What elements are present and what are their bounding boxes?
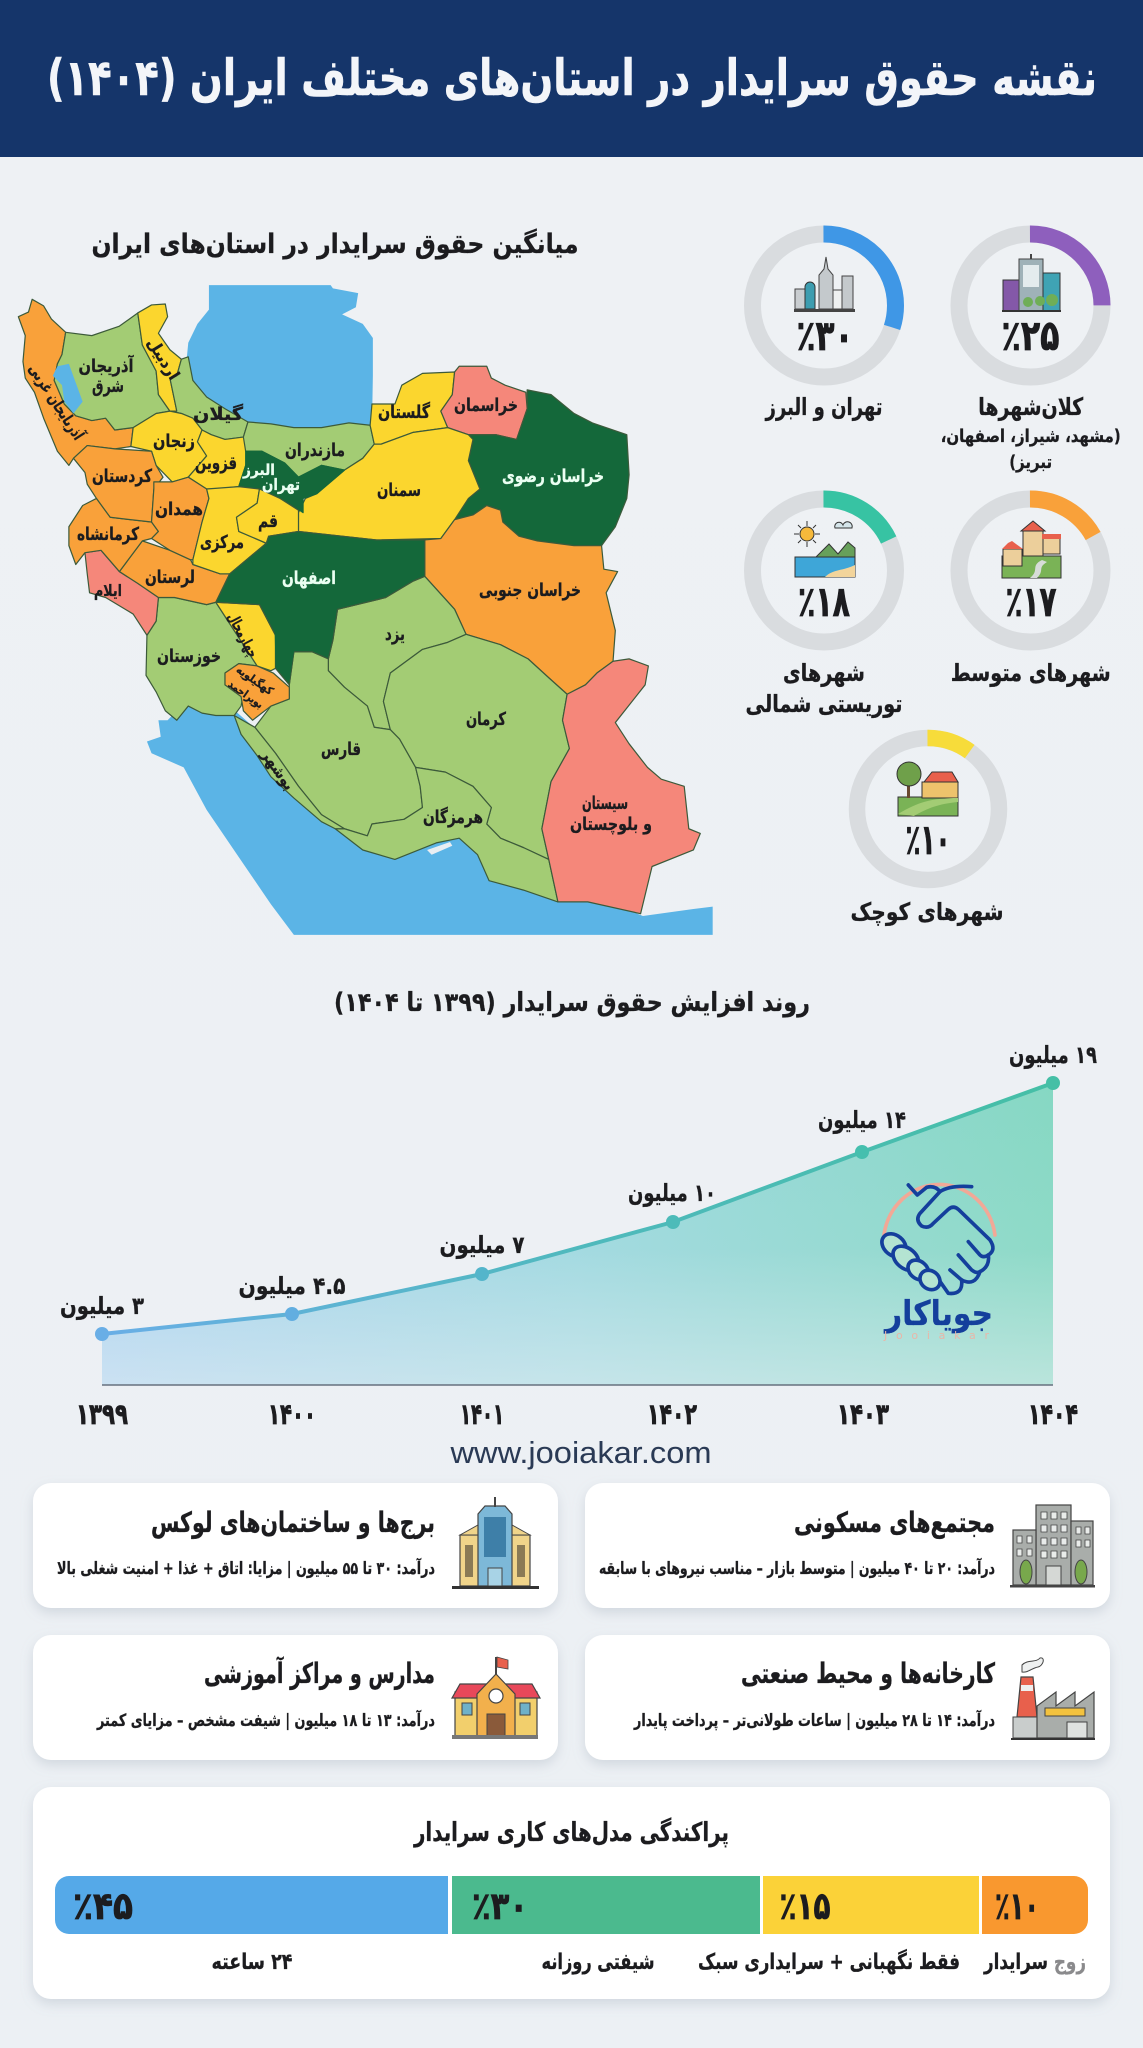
map of Iran provinces: مرکزی	[200, 532, 244, 553]
map of Iran provinces	[18, 285, 713, 935]
header banner with title	[0, 0, 1143, 157]
map of Iran provinces: لرستان	[145, 567, 195, 588]
map of Iran provinces: قزوین	[195, 453, 237, 474]
year axis labels: ۱۳۹۹	[76, 1397, 128, 1431]
map of Iran provinces: بویراحمد	[226, 678, 266, 711]
map of Iran provinces: تهران	[262, 475, 300, 494]
donut: medium cities 17%	[951, 499, 1111, 687]
map of Iran provinces: گلستان	[378, 401, 430, 423]
map of Iran provinces: خراسمان	[454, 395, 518, 416]
card: towers and luxury buildings: برج‌ها و ساختمان‌های لوکس	[151, 1506, 435, 1540]
map of Iran provinces: آذربایجان غربی	[25, 360, 89, 444]
donut: northern tourist cities 18%	[746, 499, 902, 718]
icon: tower	[452, 1497, 539, 1589]
icon: apartment block	[1010, 1505, 1095, 1588]
card: factories: درآمد: ۱۴ تا ۲۸ میلیون | ساعات طولانی‌تر – پرداخت پایدار	[633, 1709, 995, 1731]
donut: small cities 10%	[850, 738, 1004, 926]
card: towers and luxury buildings	[33, 1483, 558, 1608]
data labels	[60, 1041, 1097, 1320]
map of Iran provinces: سمنان	[377, 480, 421, 501]
card: towers and luxury buildings: درآمد: ۳۰ تا ۵۵ میلیون | مزایا: اتاق + غذا + امنیت شغلی بالا	[57, 1557, 435, 1579]
map of Iran provinces: همدان	[155, 499, 203, 520]
map of Iran provinces: کرمان	[466, 709, 506, 730]
map of Iran provinces: خراسان رضوی	[502, 466, 604, 487]
icon: small house and tree	[897, 762, 958, 816]
card: residential complexes	[585, 1483, 1110, 1608]
year axis labels: ۱۴۰۳	[837, 1397, 889, 1431]
map of Iran provinces: هرمزگان	[423, 806, 483, 828]
data labels: ۱۹ میلیون	[1009, 1041, 1097, 1069]
card: factories	[585, 1635, 1110, 1760]
map of Iran provinces: آذریجان	[78, 354, 134, 377]
data labels: ۳ میلیون	[60, 1292, 144, 1320]
icon: metropolis buildings	[1002, 254, 1061, 312]
year axis labels: ۱۴۰۲	[647, 1397, 697, 1431]
donut: Tehran and Alborz 30%: ٪۳۰	[796, 311, 854, 360]
logo: handshake Jooiakar: جویاکار	[883, 1294, 993, 1334]
website url: www.jooiakar.com	[449, 1435, 712, 1470]
map of Iran provinces: کرمانشاه	[77, 524, 139, 545]
donut: northern tourist cities 18%: توریستی شمالی	[746, 690, 902, 718]
map of Iran provinces: ایلام	[94, 581, 122, 600]
map of Iran provinces: چهارمحال	[223, 610, 262, 661]
panel: work model distribution	[33, 1787, 1110, 1999]
donut: metropolises 25%: تبریز)	[1009, 452, 1052, 473]
card: residential complexes: درآمد: ۲۰ تا ۴۰ میلیون | متوسط بازار – مناسب نیروهای با سابقه	[599, 1557, 995, 1579]
map of Iran provinces: قارس	[321, 739, 361, 760]
year axis labels	[76, 1397, 1078, 1431]
map of Iran provinces: سیستان	[582, 793, 628, 814]
card: residential complexes: مجتمع‌های مسکونی	[794, 1506, 995, 1539]
bar labels: فقط نگهبانی + سرایداری سبک	[698, 1948, 960, 1975]
map of Iran provinces: شرق	[92, 376, 124, 397]
panel heading: پراکندگی مدل‌های کاری سرایدار	[412, 1817, 729, 1848]
map of Iran provinces: خراسان جنوبی	[479, 580, 581, 601]
logo: handshake Jooiakar: Jooiakar	[883, 1329, 994, 1342]
bar labels: ۲۴ ساعته	[212, 1950, 292, 1975]
chart heading: روند افزایش حقوق سرایدار (۱۳۹۹ تا ۱۴۰۴)	[334, 988, 810, 1018]
bar labels: شیفتی روزانه	[542, 1950, 654, 1975]
icon: skyline	[794, 257, 855, 312]
map of Iran provinces: مازندران	[285, 440, 345, 461]
bar labels	[212, 1948, 1086, 1975]
map of Iran provinces: قم	[258, 511, 278, 532]
logo: handshake Jooiakar	[877, 1184, 995, 1342]
data labels: ۱۰ میلیون	[628, 1179, 716, 1207]
donut: metropolises 25%: کلان‌شهرها	[978, 393, 1083, 421]
card: factories: کارخانه‌ها و محیط صنعتی	[741, 1657, 996, 1690]
area chart: salary trend	[60, 1041, 1097, 1431]
year axis labels: ۱۴۰۱	[460, 1397, 504, 1431]
year axis labels: ۱۴۰۴	[1028, 1397, 1078, 1431]
stacked bar	[55, 1876, 1088, 1934]
map of Iran provinces: کردستان	[92, 466, 152, 487]
card: schools	[33, 1635, 558, 1760]
donut: small cities 10%: ٪۱۰	[906, 815, 950, 864]
stacked bar: ٪۳۰	[472, 1884, 528, 1928]
map of Iran provinces: یزد	[385, 624, 405, 645]
icon: factory	[1011, 1658, 1095, 1740]
icon: school	[452, 1657, 540, 1739]
year axis labels: ۱۴۰۰	[268, 1397, 316, 1431]
donut: small cities 10%: شهرهای کوچک	[850, 898, 1004, 926]
map of Iran provinces: کهگیلویه	[234, 663, 276, 698]
map of Iran provinces: گیلان	[193, 403, 244, 425]
stacked bar: ٪۱۵	[780, 1884, 830, 1928]
card: schools: درآمد: ۱۳ تا ۱۸ میلیون | شیفت مشخص – مزایای کمتر	[96, 1709, 435, 1731]
donut: northern tourist cities 18%: ٪۱۸	[798, 577, 850, 626]
donut: metropolises 25%	[941, 234, 1121, 473]
map of Iran provinces: و بلوچستان	[570, 814, 652, 835]
map heading: میانگین حقوق سرایدار در استان‌های ایران	[92, 228, 578, 260]
map of Iran provinces: اصفهان	[282, 568, 336, 589]
icon: medium city houses	[1002, 521, 1061, 578]
donut: medium cities 17%: ٪۱۷	[1006, 577, 1057, 626]
map of Iran provinces: بوشهر	[257, 746, 298, 794]
map of Iran provinces: خوزستان	[157, 646, 221, 667]
card: schools: مدارس و مراکز آموزشی	[204, 1656, 435, 1690]
donut: metropolises 25%: ٪۲۵	[1002, 311, 1060, 360]
donut: northern tourist cities 18%: شهرهای	[783, 659, 865, 687]
map of Iran provinces: زنجان	[153, 431, 195, 452]
stacked bar: ٪۴۵	[73, 1884, 133, 1928]
stacked bar: ٪۱۰	[995, 1884, 1039, 1928]
donut: Tehran and Alborz 30%	[752, 234, 896, 421]
map of Iran provinces: اردبیل	[143, 334, 184, 383]
icon: sea and mountains	[794, 521, 855, 577]
donut: Tehran and Alborz 30%: تهران و البرز	[765, 393, 882, 421]
data labels: ۷ میلیون	[440, 1231, 525, 1259]
map of Iran provinces: البرز	[242, 461, 275, 479]
data labels: ۱۴ میلیون	[818, 1106, 906, 1134]
data labels: ۴.۵ میلیون	[238, 1272, 346, 1300]
bar labels: زوج سرایدار	[983, 1950, 1086, 1975]
